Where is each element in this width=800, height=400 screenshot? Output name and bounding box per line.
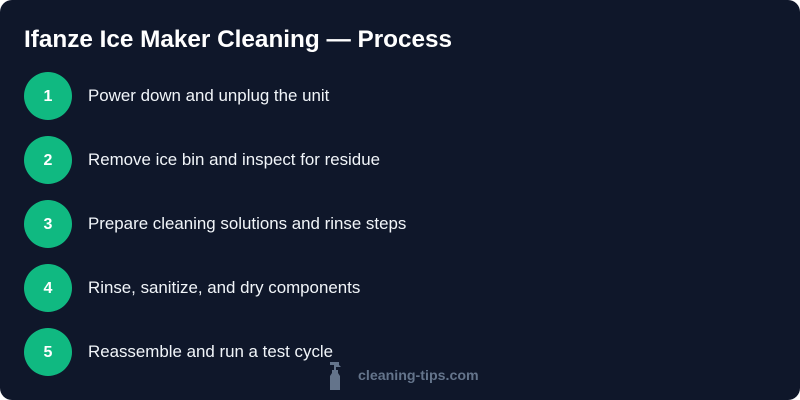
footer text: cleaning-tips.com [358, 368, 479, 384]
footer logo [330, 362, 479, 390]
step 4: Rinse, sanitize, and dry components [88, 278, 360, 297]
step 4 [24, 264, 360, 312]
step 1 [24, 72, 330, 120]
step 1: 1 [44, 88, 52, 105]
title: Ifanze Ice Maker Cleaning — Process [24, 26, 452, 53]
step 1: Power down and unplug the unit [88, 86, 329, 105]
step 4: 4 [44, 280, 52, 297]
step 3: 3 [44, 216, 52, 233]
icon: spray bottle [330, 362, 341, 390]
step 5: 5 [44, 344, 52, 361]
step 2: Remove ice bin and inspect for residue [88, 150, 380, 169]
step 5: Reassemble and run a test cycle [88, 342, 333, 361]
step 5 [24, 328, 333, 376]
step 3: Prepare cleaning solutions and rinse steps [88, 214, 406, 233]
step 3 [24, 200, 406, 248]
step 2 [24, 136, 380, 184]
step 2: 2 [44, 152, 52, 169]
